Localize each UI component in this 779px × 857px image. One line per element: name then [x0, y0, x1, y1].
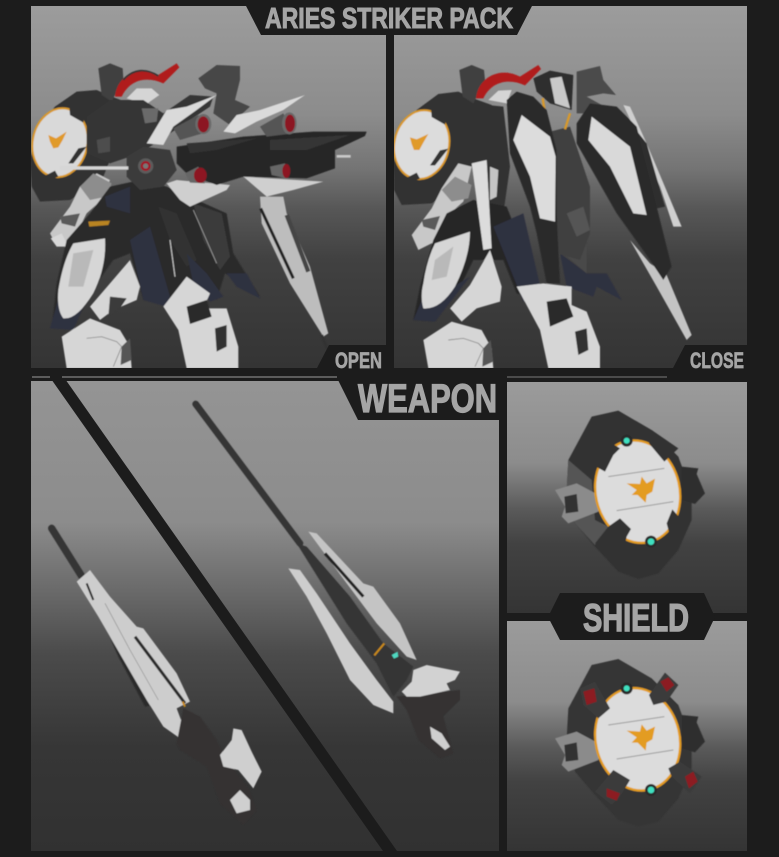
shield on back: [31, 89, 120, 202]
white bars: [60, 166, 128, 170]
shield: open: [555, 659, 705, 827]
small white blade: [472, 160, 492, 250]
left arm: [412, 163, 472, 250]
label: open: [317, 345, 394, 373]
label: close: [673, 345, 747, 373]
top right mount: [577, 66, 617, 113]
shield banner: [507, 593, 747, 640]
lower skirt: [413, 193, 622, 322]
wing left: [507, 92, 560, 283]
shield: closed: [555, 411, 705, 579]
red crest: [476, 65, 541, 98]
head unit: [533, 71, 573, 129]
logo: orange emblem: [627, 724, 655, 751]
missile pods: [580, 673, 702, 805]
panel: closed configuration: [388, 6, 747, 368]
shoulder mount: [459, 65, 485, 103]
rifle on right: [260, 197, 328, 349]
panel: weapon: [31, 376, 499, 851]
logo: orange emblem: [627, 477, 655, 503]
lower white wing plates: [166, 176, 323, 208]
rifle: open: [196, 404, 460, 758]
panel: shield open: [507, 621, 747, 851]
torso: [474, 104, 510, 206]
shield banner: SHIELD: [583, 597, 689, 640]
panel: open configuration: [26, 6, 386, 368]
upper wing plates: [147, 95, 305, 145]
helmet: [127, 88, 159, 104]
robot: striker pack open: [26, 63, 367, 368]
rear shoulder mount: [198, 65, 250, 125]
label: close: CLOSE: [690, 348, 744, 373]
white legs and armour: [58, 238, 238, 368]
center body: [552, 126, 590, 259]
wing right: [577, 103, 672, 280]
rear rail: [623, 105, 682, 227]
skirt armour: [54, 182, 259, 315]
white legs and armour: [422, 232, 600, 368]
navy flaps: [50, 187, 260, 330]
torso: [87, 95, 213, 163]
shield on back: [394, 91, 492, 206]
diagonal divider: [49, 376, 397, 851]
panel: shield front: [507, 382, 747, 613]
title banner: ARIES STRIKER PACK: [265, 3, 513, 35]
helmet: [488, 90, 512, 103]
weapon banner: WEAPON: [358, 377, 497, 421]
red crest: [115, 63, 179, 97]
label: open: OPEN: [335, 348, 382, 373]
left arm: [50, 173, 110, 247]
central hub: [127, 147, 177, 190]
rifle: closed: [52, 528, 262, 825]
robot: striker pack closed: [388, 65, 692, 368]
main cannon blade: [177, 132, 367, 185]
rifle on right: [630, 240, 692, 340]
thrusters: [138, 112, 297, 183]
front shoulder mount: [98, 63, 123, 102]
